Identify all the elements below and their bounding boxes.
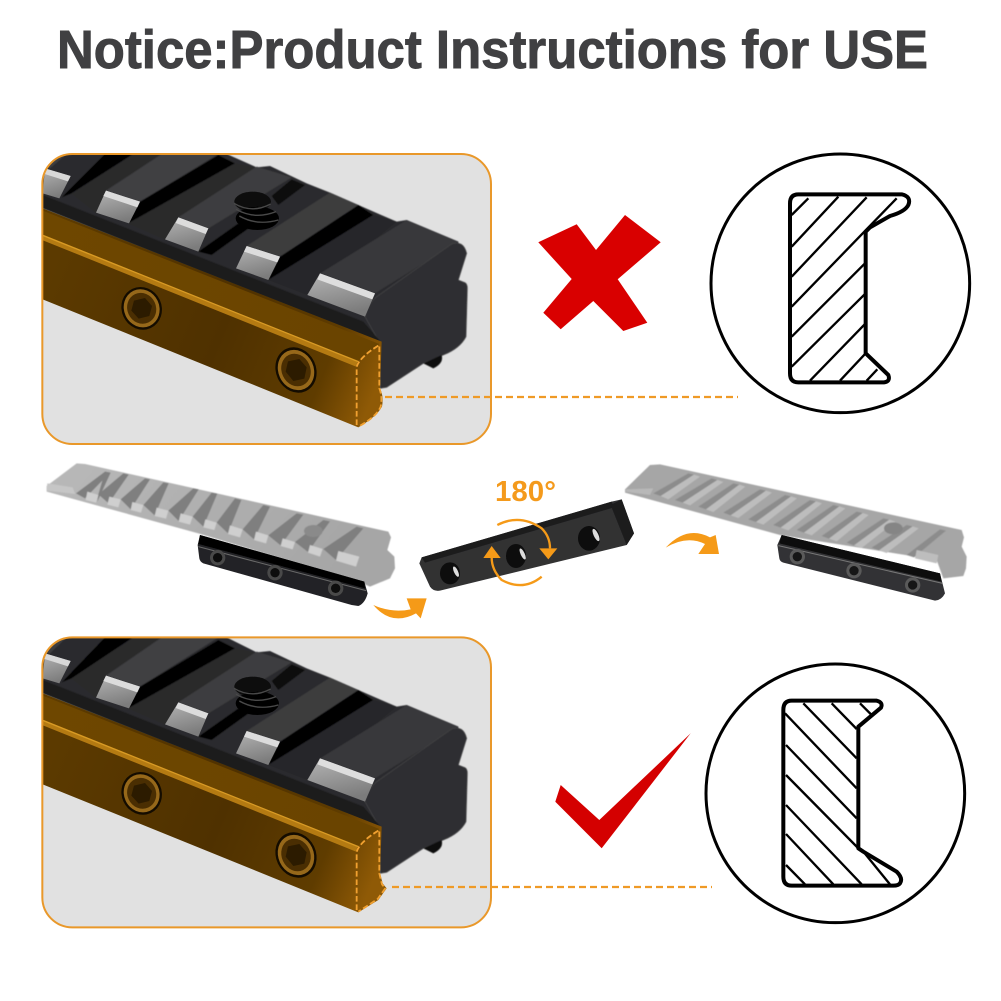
rail teeth [86, 492, 359, 567]
adapter block removed and rotated [419, 499, 634, 591]
rotation arrows [483, 520, 557, 585]
hatched cross-section [783, 701, 901, 886]
socket screw [121, 287, 162, 330]
rail teeth [661, 475, 919, 553]
icon: red check mark [555, 733, 691, 848]
rail slots [76, 472, 363, 560]
highlighted gold side rail [43, 208, 383, 427]
icon: incorrect profile circle [711, 154, 970, 413]
icon: correct profile circle [706, 664, 965, 923]
rail close-up photo [43, 637, 467, 912]
socket screw [121, 772, 162, 815]
mounted rail: incorrect orientation [47, 463, 395, 606]
threaded hole [234, 192, 279, 230]
mounted rail: correct orientation [625, 464, 967, 601]
silver rail teeth [43, 168, 375, 317]
socket screw [275, 347, 317, 393]
title: Notice:Product Instructions for USE [57, 20, 928, 80]
black adapter block [198, 535, 368, 606]
highlighted gold side rail [43, 693, 387, 912]
hatched cross-section [790, 194, 909, 382]
black adapter block [777, 535, 945, 601]
panel: correct mounting close-up [42, 637, 491, 927]
dashed profile outline [357, 830, 385, 912]
dashed leader line: correct [392, 886, 712, 888]
panel: incorrect mounting close-up [42, 154, 491, 444]
rail slots [653, 473, 946, 557]
arrow: to adapter [373, 598, 427, 618]
dashed profile outline [357, 345, 381, 427]
screw holes [440, 526, 601, 584]
icon: red cross [538, 215, 661, 331]
threaded hole [234, 677, 279, 715]
dashed leader line: incorrect [385, 396, 738, 398]
rail close-up photo [43, 154, 467, 427]
socket screw [275, 832, 316, 878]
label: 180 degrees: 180° [495, 476, 556, 508]
arrow: to reassembled rail [666, 533, 719, 554]
silver rail teeth [43, 653, 375, 802]
